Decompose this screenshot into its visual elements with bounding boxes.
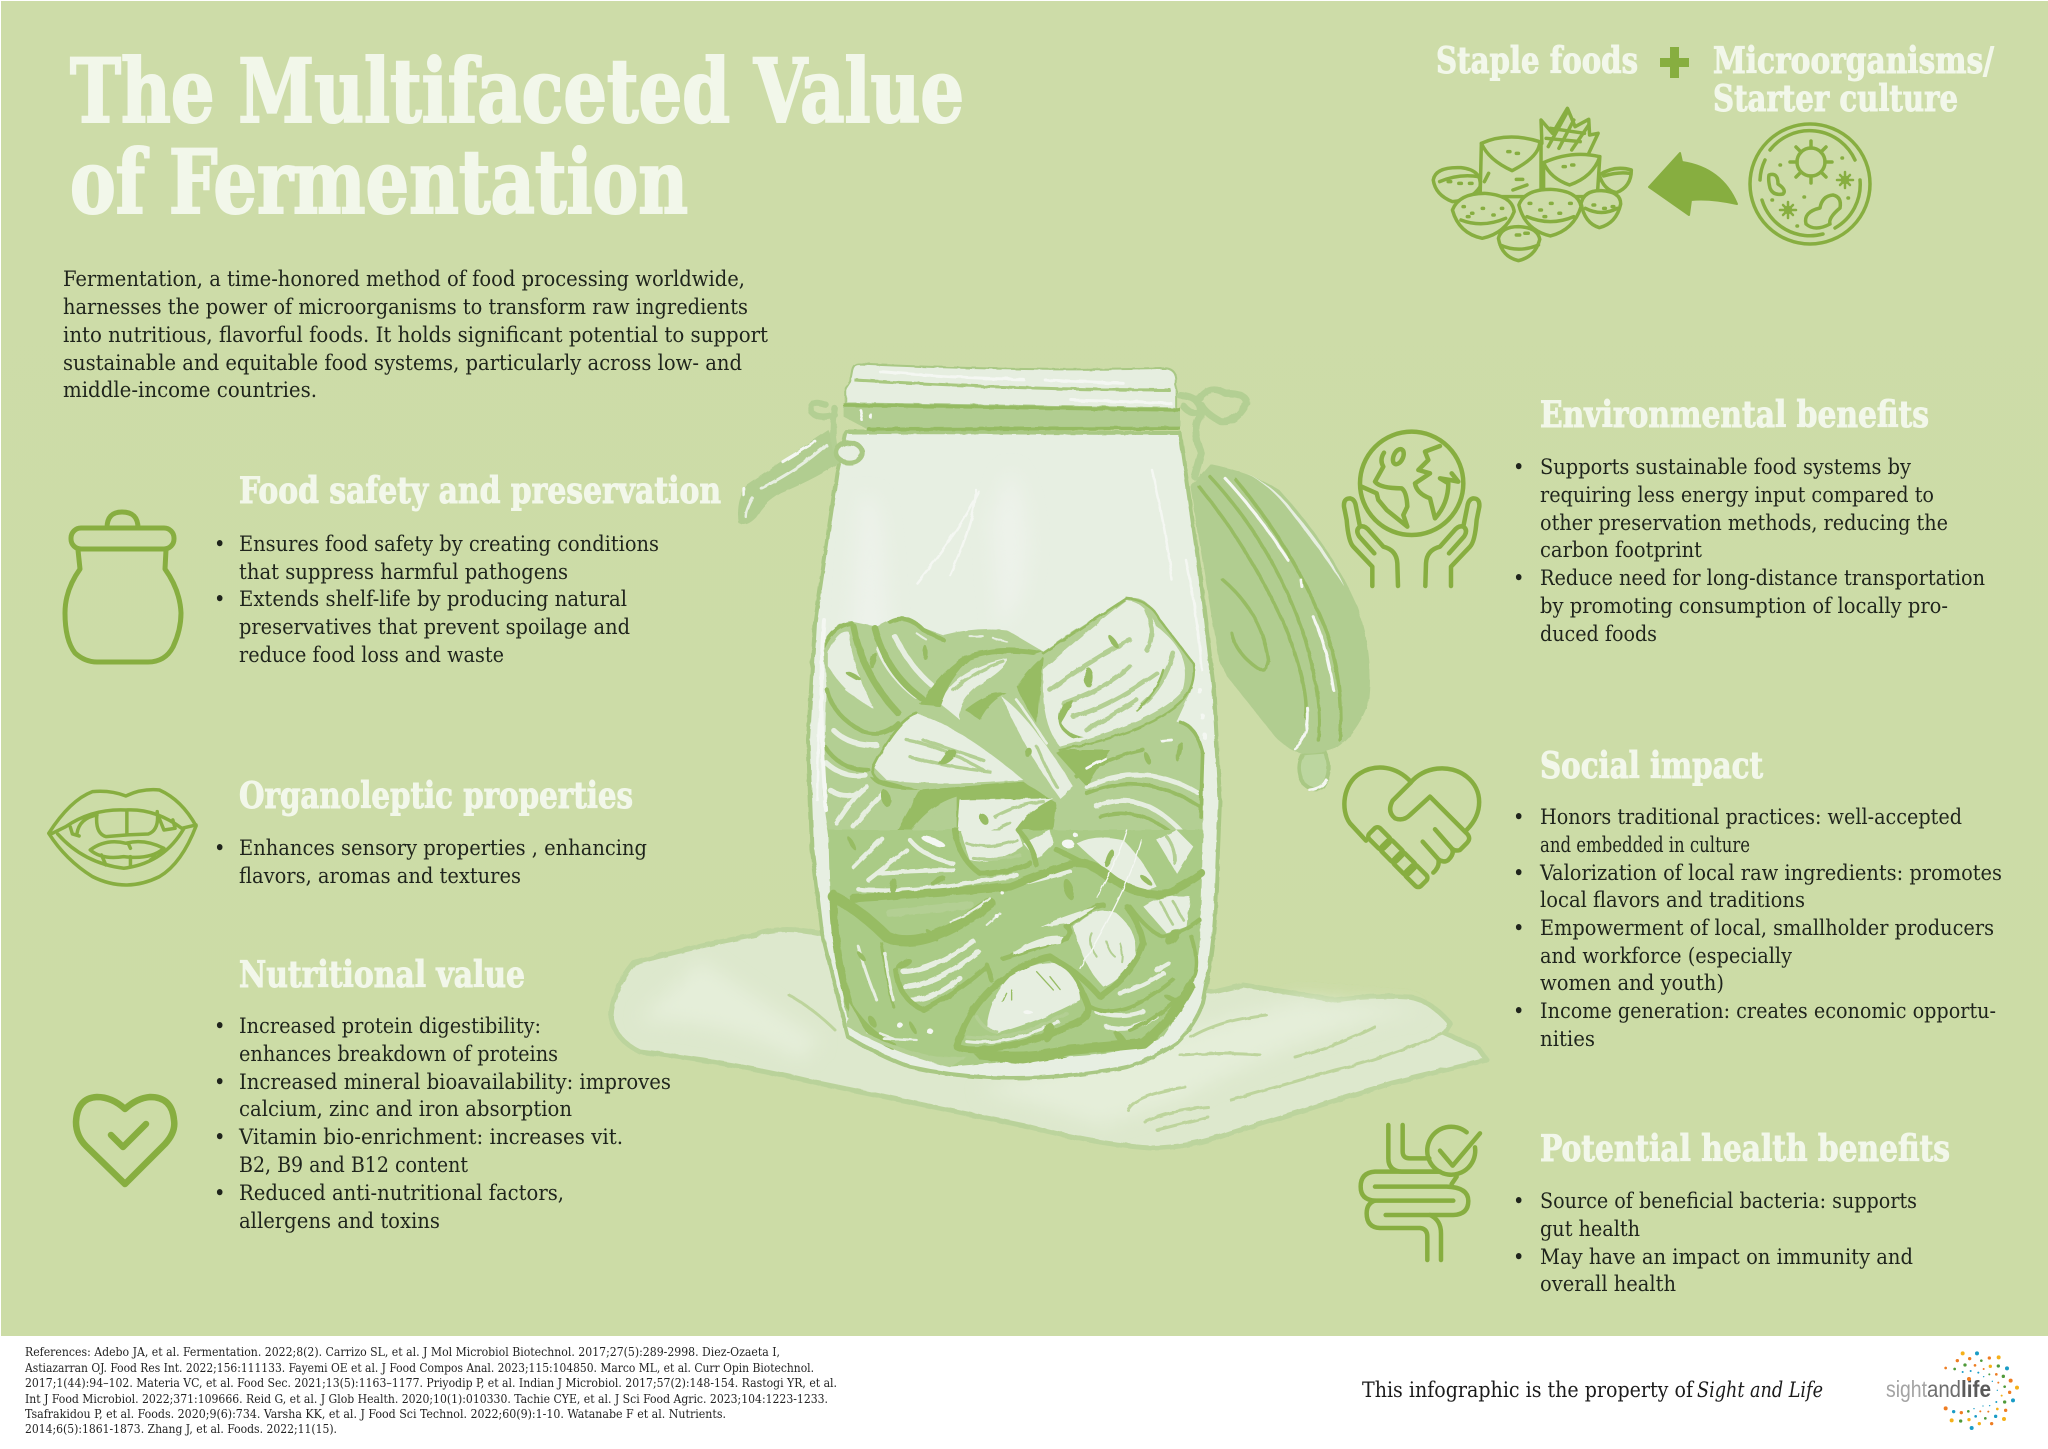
bullet list: carbon footprint bbox=[1540, 538, 1702, 563]
icon: staple foods bowls and corn bbox=[1433, 108, 1631, 261]
intro text: middle-income countries. bbox=[63, 378, 317, 403]
bullet list: and embedded in culture bbox=[1540, 833, 1750, 858]
heading: microorganisms: Starter culture bbox=[1713, 78, 1958, 120]
title: of Fermentation bbox=[70, 130, 688, 234]
icon: arrow bbox=[1649, 153, 1737, 215]
glass side reflections bbox=[821, 620, 1205, 810]
intro text: into nutritious, flavorful foods. It holds significant potential to support bbox=[63, 323, 768, 348]
bullet list: Increased mineral bioavailability: improves bbox=[239, 1070, 671, 1095]
bullet list: Valorization of local raw ingredients: promotes bbox=[1539, 861, 2002, 886]
panel: food safety and preservation bbox=[65, 470, 721, 668]
(upper left leaves) bbox=[823, 619, 1010, 795]
heading: Food safety and preservation bbox=[239, 470, 721, 512]
title bbox=[70, 39, 964, 234]
bullet list: • bbox=[1513, 999, 1524, 1024]
logo dots bbox=[1944, 1351, 2019, 1430]
jar rim and gasket bbox=[844, 364, 1180, 429]
bullet list: • bbox=[1513, 1189, 1524, 1214]
property statement: This infographic is the property of bbox=[1362, 1378, 1695, 1403]
logo wordmark: and bbox=[1927, 1376, 1961, 1402]
bullet list: • bbox=[214, 1181, 225, 1206]
bullet list: • bbox=[214, 1014, 225, 1039]
intro text: Fermentation, a time-honored method of food processing worldwide, bbox=[63, 267, 745, 292]
(lower right stripes) bbox=[1097, 963, 1187, 1029]
logo wordmark: sight bbox=[1886, 1376, 1928, 1402]
bullet list bbox=[1513, 805, 2002, 1052]
bullet list: local flavors and traditions bbox=[1540, 888, 1805, 913]
intro text: harnesses the power of microorganisms to transform raw ingredients bbox=[63, 295, 748, 320]
bullet list: Reduce need for long-distance transportation bbox=[1540, 566, 1985, 591]
icon: intestines with check mark bbox=[1361, 1125, 1480, 1260]
icon: clay pot bbox=[65, 512, 181, 662]
bullet list: • bbox=[214, 1070, 225, 1095]
bullet list: Income generation: creates economic opportu- bbox=[1540, 999, 1996, 1024]
bullet list: • bbox=[1513, 455, 1524, 480]
heading: microorganisms: Microorganisms/ bbox=[1713, 40, 1994, 82]
logo wordmark: life bbox=[1961, 1376, 1991, 1402]
heading: Social impact bbox=[1540, 745, 1763, 787]
(top right leaf) bbox=[1043, 600, 1185, 747]
bullet list: women and youth) bbox=[1540, 971, 1724, 996]
heading: Potential health benefits bbox=[1540, 1128, 1950, 1170]
heading: Nutritional value bbox=[239, 954, 525, 996]
bullet list: that suppress harmful pathogens bbox=[239, 560, 568, 585]
bullet list: preservatives that prevent spoilage and bbox=[239, 615, 630, 640]
bullet list: flavors, aromas and textures bbox=[239, 864, 521, 889]
heading: microorganisms bbox=[1713, 40, 1994, 120]
bullet list bbox=[214, 532, 659, 668]
bullet list: • bbox=[1513, 805, 1524, 830]
bullet list: • bbox=[214, 532, 225, 557]
jar illustration bbox=[611, 364, 1487, 1148]
icon: globe in hands bbox=[1344, 432, 1479, 586]
bullet list: • bbox=[1513, 916, 1524, 941]
bullet list: calcium, zinc and iron absorption bbox=[239, 1097, 572, 1122]
references: Astiazarran OJ. Food Res Int. 2022;156:111133. Fayemi OE et al. J Food Compos Anal. 2023;115:104850. Marco ML, et al. Curr Opin Biotechnol. bbox=[24, 1361, 814, 1375]
glass highlights bbox=[850, 470, 1028, 640]
intro text: sustainable and equitable food systems, particularly across low- and bbox=[63, 351, 742, 376]
logo: sight and life bbox=[1886, 1351, 2019, 1430]
intro text bbox=[63, 267, 768, 403]
lid bbox=[1190, 464, 1370, 790]
bullet list: enhances breakdown of proteins bbox=[239, 1042, 558, 1067]
bullet list: Ensures food safety by creating conditions bbox=[239, 532, 659, 557]
panel: environmental benefits bbox=[1344, 394, 1985, 647]
bullet list: nities bbox=[1540, 1027, 1595, 1052]
heading: Organoleptic properties bbox=[239, 775, 633, 817]
bullet list: overall health bbox=[1540, 1272, 1676, 1297]
icon: handshake heart bbox=[1344, 768, 1479, 889]
bullet list: • bbox=[214, 1125, 225, 1150]
icon: mouth bbox=[49, 790, 196, 885]
bullet list: • bbox=[1513, 1245, 1524, 1270]
bullet list: gut health bbox=[1540, 1217, 1640, 1242]
references: Tsafrakidou P, et al. Foods. 2020;9(6):734. Varsha KK, et al. J Food Sci Technol. 2022;60(9):1-10. Watanabe F et al. Nutrients. bbox=[25, 1407, 726, 1421]
bullet list: Vitamin bio-enrichment: increases vit. bbox=[238, 1125, 623, 1150]
bullet list: • bbox=[1513, 861, 1524, 886]
references: Int J Food Microbiol. 2022;371:109666. Reid G, et al. J Glob Health. 2020;10(1):010330. Tachie CYE, et al. J Sci Food Agric. 2023;104:1223-1233. bbox=[25, 1392, 828, 1406]
bullet list: May have an impact on immunity and bbox=[1540, 1245, 1913, 1270]
bullet list: Reduced anti-nutritional factors, bbox=[239, 1181, 564, 1206]
heading: Environmental benefits bbox=[1540, 394, 1929, 436]
icon: heart with check mark bbox=[76, 1097, 174, 1184]
bullet list: duced foods bbox=[1540, 622, 1657, 647]
(lower leaves) bbox=[957, 798, 1053, 843]
bullet list: other preservation methods, reducing the bbox=[1540, 511, 1948, 536]
panel: nutritional value bbox=[76, 954, 671, 1234]
(top stripes) bbox=[853, 838, 1070, 891]
bullet list: B2, B9 and B12 content bbox=[239, 1153, 468, 1178]
title: The Multifaceted Value bbox=[70, 39, 964, 143]
bullet list bbox=[1513, 455, 1985, 647]
heading: staple foods: Staple foods bbox=[1436, 40, 1638, 82]
bullet list: • bbox=[214, 836, 225, 861]
references: 2017;1(44):94–102. Materia VC, et al. Food Sec. 2021;13(5):1163–1177. Priyodip P, et al. Indian J Microbiol. 2017;57(2):148-154. Rastogi YR, et al. bbox=[25, 1376, 837, 1390]
bullet list: Honors traditional practices: well-accepted bbox=[1540, 805, 1962, 830]
jar contents: leaves upper half bbox=[822, 598, 1203, 843]
staple foods plus microorganisms diagram bbox=[1433, 40, 1994, 261]
jar glass body bbox=[808, 432, 1220, 1078]
bullet list: reduce food loss and waste bbox=[239, 643, 504, 668]
bullet list bbox=[1513, 1189, 1917, 1297]
(centre leaves) bbox=[940, 658, 1007, 720]
bullet list bbox=[214, 1014, 671, 1234]
bullet list: • bbox=[214, 587, 225, 612]
bullet list: Increased protein digestibility: bbox=[239, 1014, 541, 1039]
icon: petri dish with microorganisms bbox=[1750, 124, 1870, 244]
(upper right oval) bbox=[1003, 905, 1103, 958]
logo wordmark bbox=[1886, 1376, 1991, 1402]
bullet list: • bbox=[1513, 566, 1524, 591]
clasps bbox=[738, 389, 1247, 525]
bullet list bbox=[214, 836, 647, 889]
jar contents: leaves lower half bbox=[828, 830, 1203, 1067]
(lower centre oval) bbox=[957, 957, 1088, 1050]
panel: social impact bbox=[1344, 745, 2002, 1052]
bullet list: Enhances sensory properties , enhancing bbox=[239, 836, 647, 861]
references: References: Adebo JA, et al. Fermentation. 2022;8(2). Carrizo SL, et al. J Mol Microbiol Biotechnol. 2017;27(5):289-2998. Diez-Ozaeta I, bbox=[25, 1345, 780, 1359]
bullet list: by promoting consumption of locally pro- bbox=[1540, 594, 1948, 619]
icon: plus bbox=[1660, 47, 1689, 78]
references bbox=[24, 1345, 837, 1436]
bullet list: Extends shelf-life by producing natural bbox=[239, 587, 627, 612]
panel: organoleptic properties bbox=[49, 775, 647, 889]
bullet list: Supports sustainable food systems by bbox=[1540, 455, 1911, 480]
bullet list: requiring less energy input compared to bbox=[1540, 483, 1934, 508]
cloth under the jar bbox=[611, 929, 1487, 1148]
property statement: Sight and Life bbox=[1697, 1378, 1823, 1403]
(left fan) bbox=[833, 897, 990, 941]
references: 2014;6(5):1861-1873. Zhang J, et al. Foods. 2022;11(15). bbox=[25, 1422, 337, 1436]
bullet list: and workforce (especially bbox=[1540, 944, 1792, 969]
bullet list: Empowerment of local, smallholder producers bbox=[1540, 916, 1994, 941]
bullet list: allergens and toxins bbox=[239, 1209, 440, 1234]
panel: potential health benefits bbox=[1361, 1125, 1950, 1297]
bullet list: Source of beneficial bacteria: supports bbox=[1540, 1189, 1917, 1214]
